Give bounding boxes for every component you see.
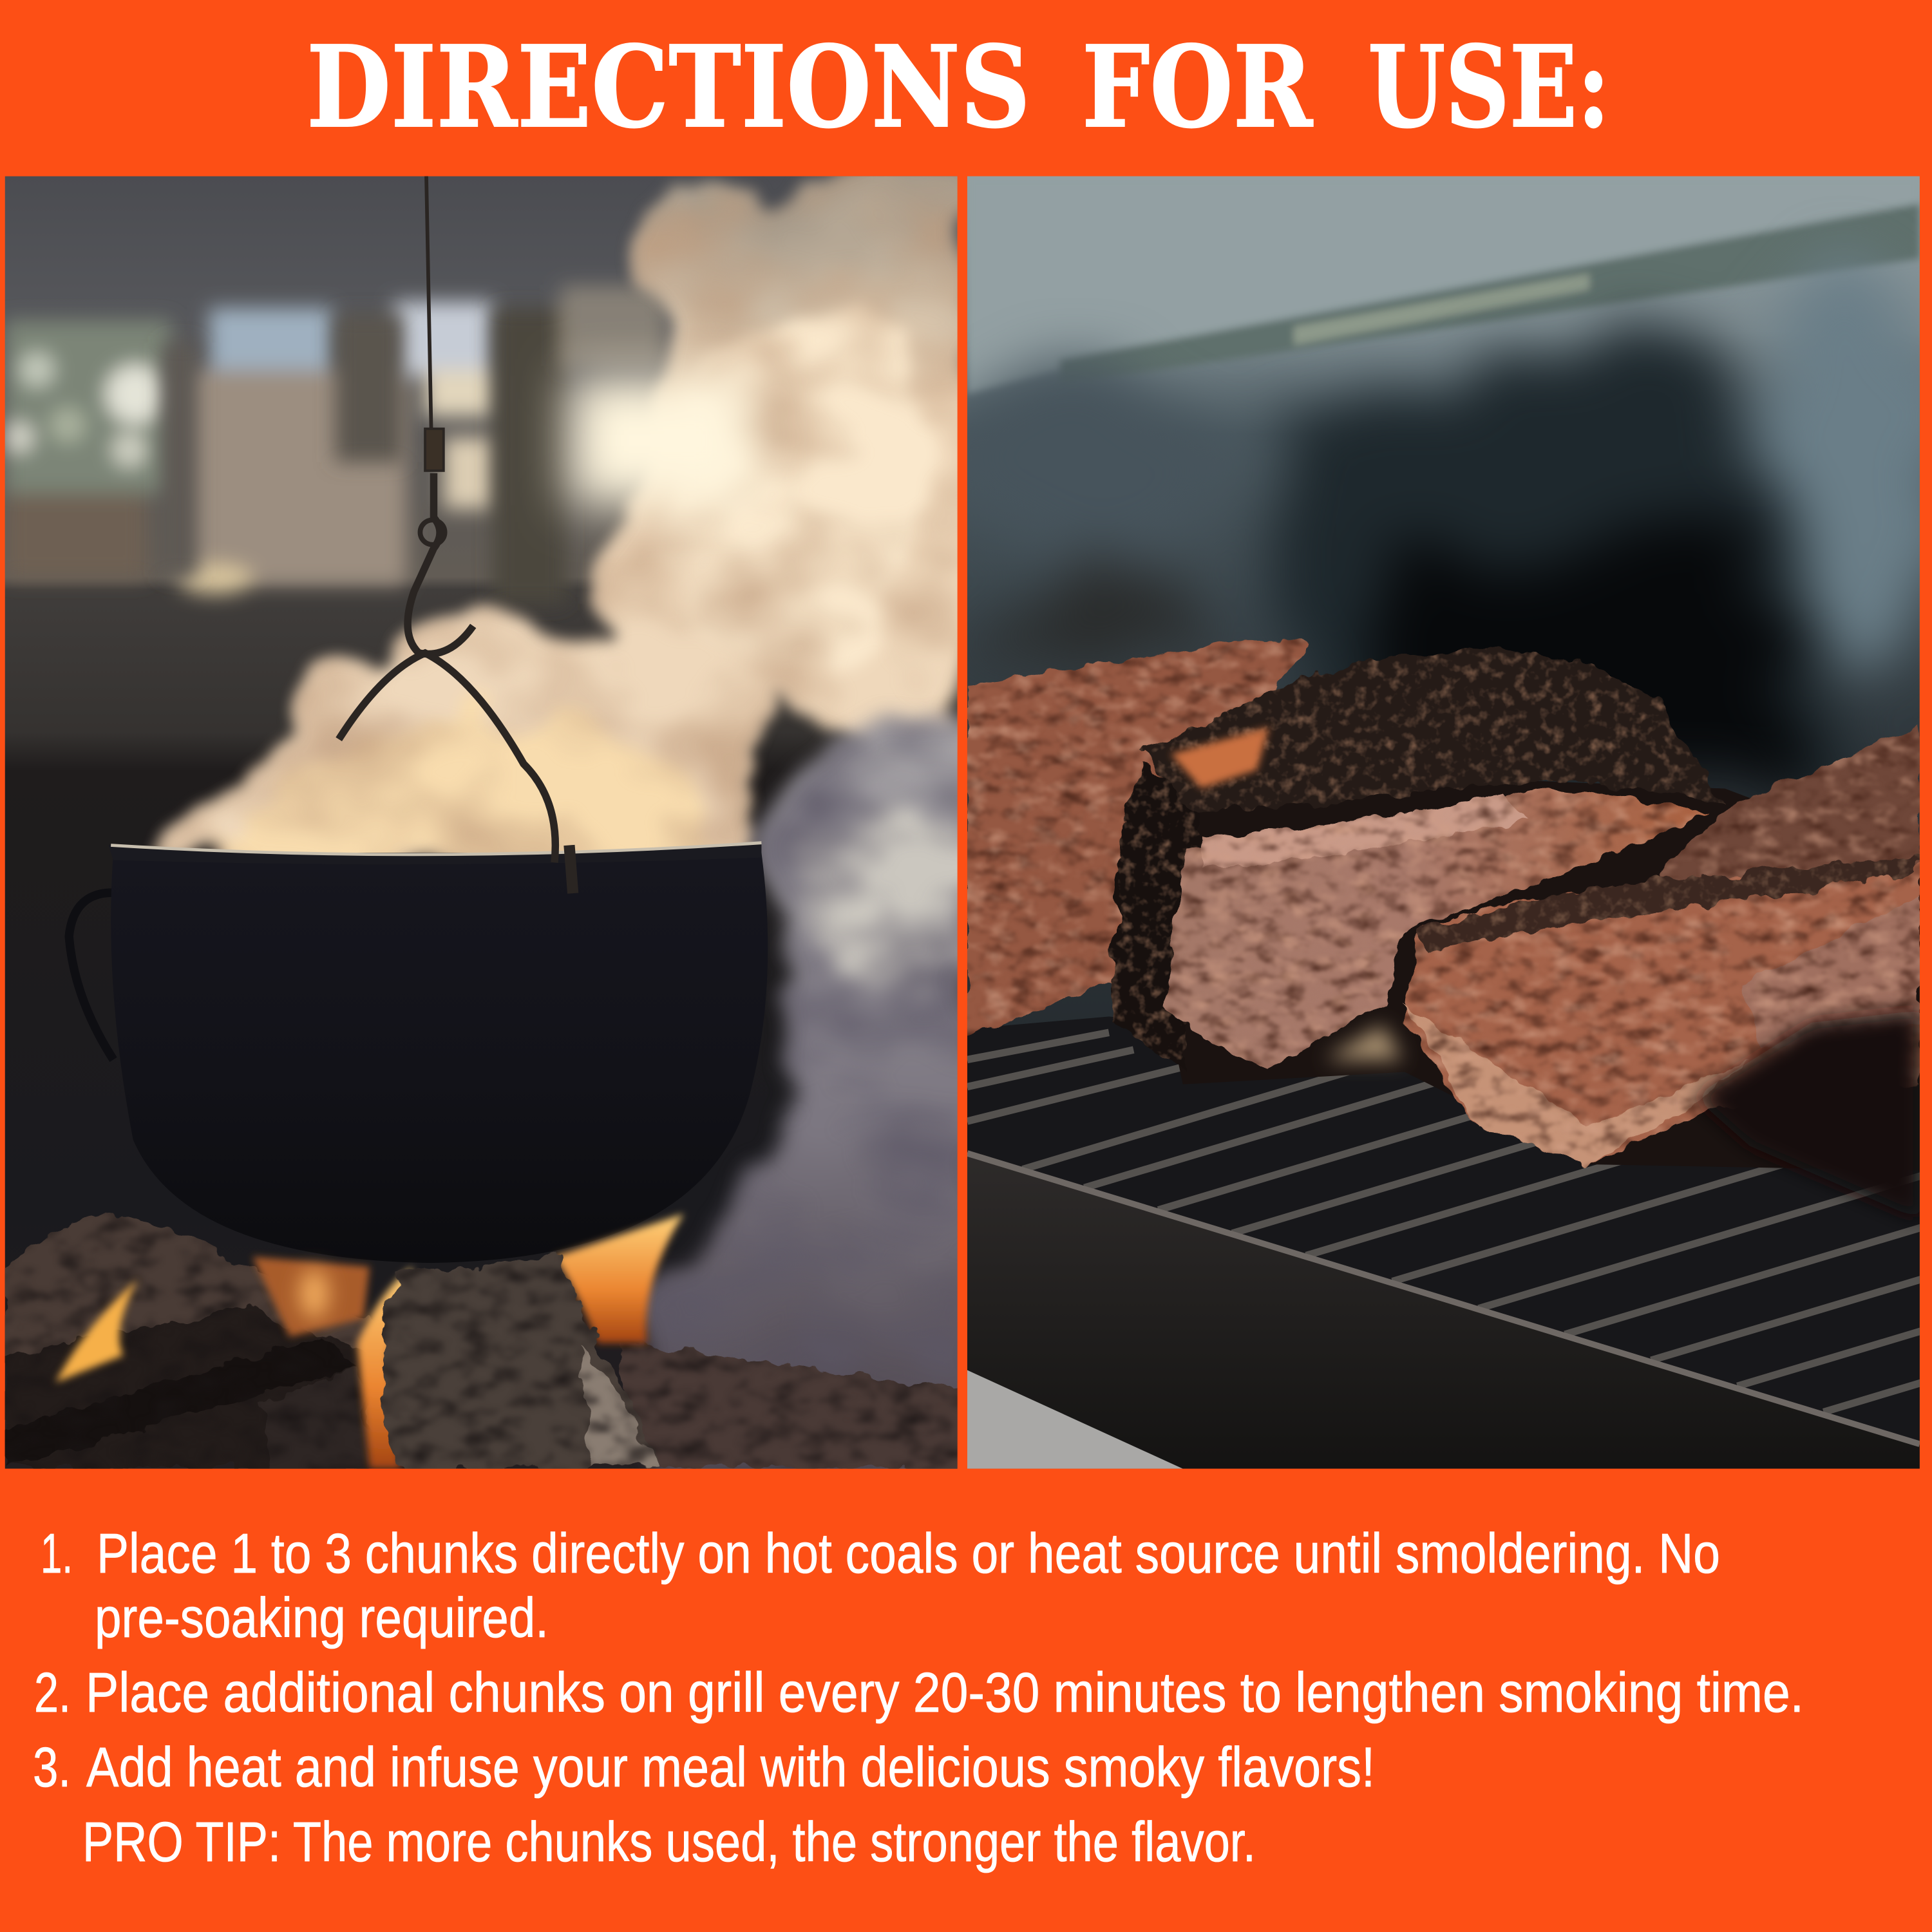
background: bright windows [4, 302, 497, 594]
step 1 [41, 1522, 1720, 1649]
step 1: 1. [41, 1522, 73, 1585]
title: FOR [1082, 22, 1313, 153]
smoke: bright plume [154, 175, 986, 862]
grill bars [967, 1021, 1932, 1412]
smoke: grey purple plume [643, 715, 986, 1479]
grill front ledge [967, 1152, 1920, 1469]
step 1: Place 1 to 3 chunks directly on hot coals or heat source until smoldering. No [97, 1522, 1720, 1585]
title [307, 22, 1610, 153]
cauldron handle [69, 893, 123, 1059]
background: sun glare [569, 376, 754, 505]
brisket: pale lower edge [1405, 1004, 1750, 1164]
brisket: fat highlight [1171, 727, 1269, 788]
step 2: 2. [34, 1662, 71, 1724]
brisket: dark shadow end [1694, 1010, 1920, 1220]
ledge highlight [967, 1153, 1920, 1444]
ground and embers [5, 1217, 973, 1469]
brisket: central cut slice [1164, 788, 1707, 1070]
title: DIRECTIONS [307, 22, 1030, 153]
brisket: fat seam [1325, 1025, 1402, 1059]
step 1: pre-soaking required. [95, 1587, 549, 1649]
brisket: left piece [967, 641, 1309, 1037]
brisket: slice top surface [1201, 795, 1528, 869]
log [381, 1255, 659, 1469]
pro tip: PRO TIP: The more chunks used, the stronger the flavor. [82, 1811, 1256, 1873]
flame core [299, 1269, 329, 1318]
brisket: right top piece [1639, 724, 1920, 900]
panel: photo of smoked brisket on grill [961, 176, 1932, 1469]
cauldron body [111, 853, 768, 1263]
cauldron rim [108, 843, 761, 864]
brisket: central charred top [1140, 650, 1725, 813]
meat shadow filler [1115, 764, 1920, 1171]
brisket: char edge [1112, 764, 1201, 1072]
title: USE: [1368, 22, 1610, 153]
pale ground [967, 1370, 1183, 1469]
background: wooden posts [163, 286, 665, 604]
rim highlight [111, 843, 761, 855]
brisket: far right end [1743, 893, 1920, 1047]
grill [967, 1016, 1932, 1442]
flames [55, 1214, 684, 1469]
panel: photo of smoking cauldron over fire [4, 175, 986, 1479]
brisket: crust on right piece [1417, 857, 1920, 955]
smoker hood band [967, 176, 1920, 394]
text block: directions [33, 1522, 1804, 1873]
dark smoker interior [961, 271, 1932, 813]
step 3: Add heat and infuse your meal with delicious smoky flavors! [86, 1736, 1375, 1799]
wire and hook [339, 176, 573, 893]
brisket: right front piece [1405, 862, 1920, 1164]
step 3: 3. [33, 1736, 71, 1799]
